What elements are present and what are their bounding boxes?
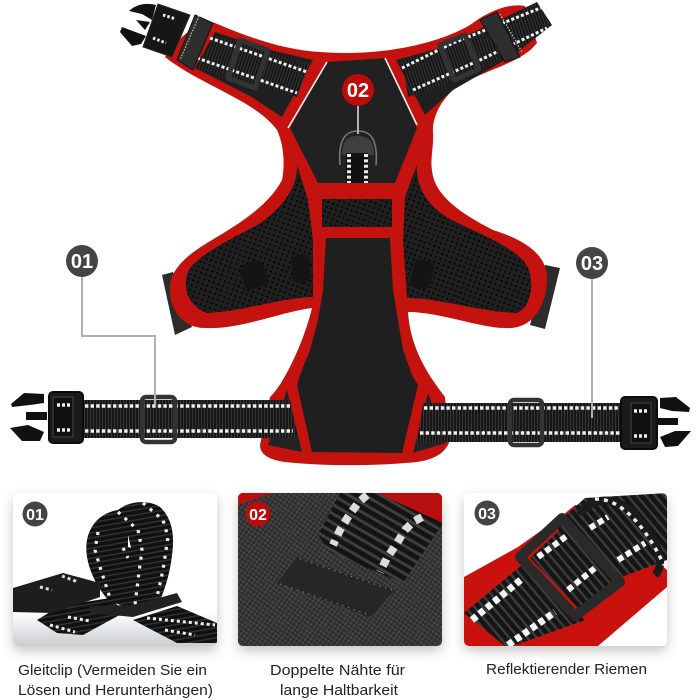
badge 02 [342, 74, 374, 106]
red harness outline [165, 5, 547, 465]
caption 01: Gleitclip (Vermeiden Sie ein [18, 662, 207, 679]
harness [10, 2, 691, 465]
panel: reflective strap photo [464, 493, 667, 646]
caption 02: lange Haltbarkeit [280, 682, 399, 699]
buckle [13, 573, 100, 613]
red corners [238, 493, 272, 505]
strap keeper [480, 12, 520, 62]
webbing inside slider [530, 525, 612, 608]
lower side patches [268, 390, 302, 452]
left wing mesh [186, 165, 313, 313]
loop stitching [95, 503, 168, 605]
upper webbing [555, 493, 667, 585]
left buckle [49, 392, 83, 443]
left slider [142, 397, 175, 442]
badge inset 03 [474, 500, 500, 526]
caption 02 [270, 662, 405, 699]
stitched seam [277, 557, 395, 617]
badge inset 01 [22, 502, 48, 526]
lower left strap [10, 392, 298, 443]
badge inset 03: 03 [478, 506, 496, 523]
lower strap [37, 598, 217, 643]
side buckle [143, 4, 190, 57]
badge 03 [576, 247, 608, 279]
strap loop [86, 502, 173, 610]
badge 01 [66, 245, 98, 277]
badge 03: 03 [581, 253, 603, 275]
upper right strap [402, 2, 552, 97]
badge 02: 02 [347, 80, 369, 102]
wing tab right [530, 265, 560, 329]
right slider [510, 400, 542, 445]
badge inset 01: 01 [26, 507, 44, 524]
leader line 03 [591, 279, 593, 418]
plastic slider [520, 518, 620, 616]
upper left black panel [195, 32, 313, 117]
caption 02: Doppelte Nähte für [270, 662, 405, 679]
leader line 01 [82, 277, 155, 405]
reflective piping [288, 58, 417, 128]
right wing mesh [403, 165, 531, 313]
caption 03: Reflektierender Riemen [486, 661, 647, 678]
leader line 02 [357, 106, 359, 134]
badge 01: 01 [71, 251, 93, 273]
badge inset 02: 02 [249, 507, 267, 524]
lower webbing [464, 565, 585, 646]
upper left strap [120, 4, 310, 97]
keeper loop [580, 501, 660, 575]
badge inset 02 [246, 502, 270, 526]
chest panel [290, 58, 417, 183]
slider [440, 35, 479, 80]
right clip prongs [658, 397, 691, 447]
caption 01 [18, 662, 213, 699]
flat slider [90, 593, 182, 617]
caption 01: Lösen und Herunterhängen) [18, 682, 213, 699]
mesh padding bumps [238, 255, 435, 291]
D ring [340, 131, 376, 183]
center mesh rectangle [322, 199, 392, 227]
left clip prongs [10, 393, 47, 441]
wing tab left [162, 272, 192, 335]
upper right black panel [396, 25, 505, 115]
strap keeper [177, 15, 213, 70]
red edging [464, 505, 667, 646]
slider [228, 40, 268, 88]
loop inner gap [128, 535, 131, 548]
panel: slide clip photo [13, 493, 217, 646]
lower body panel [297, 238, 418, 453]
clip prongs [120, 4, 156, 46]
right buckle [621, 397, 657, 449]
webbing [318, 493, 443, 583]
lower right strap [417, 397, 691, 449]
panel: double stitching photo [238, 493, 443, 646]
